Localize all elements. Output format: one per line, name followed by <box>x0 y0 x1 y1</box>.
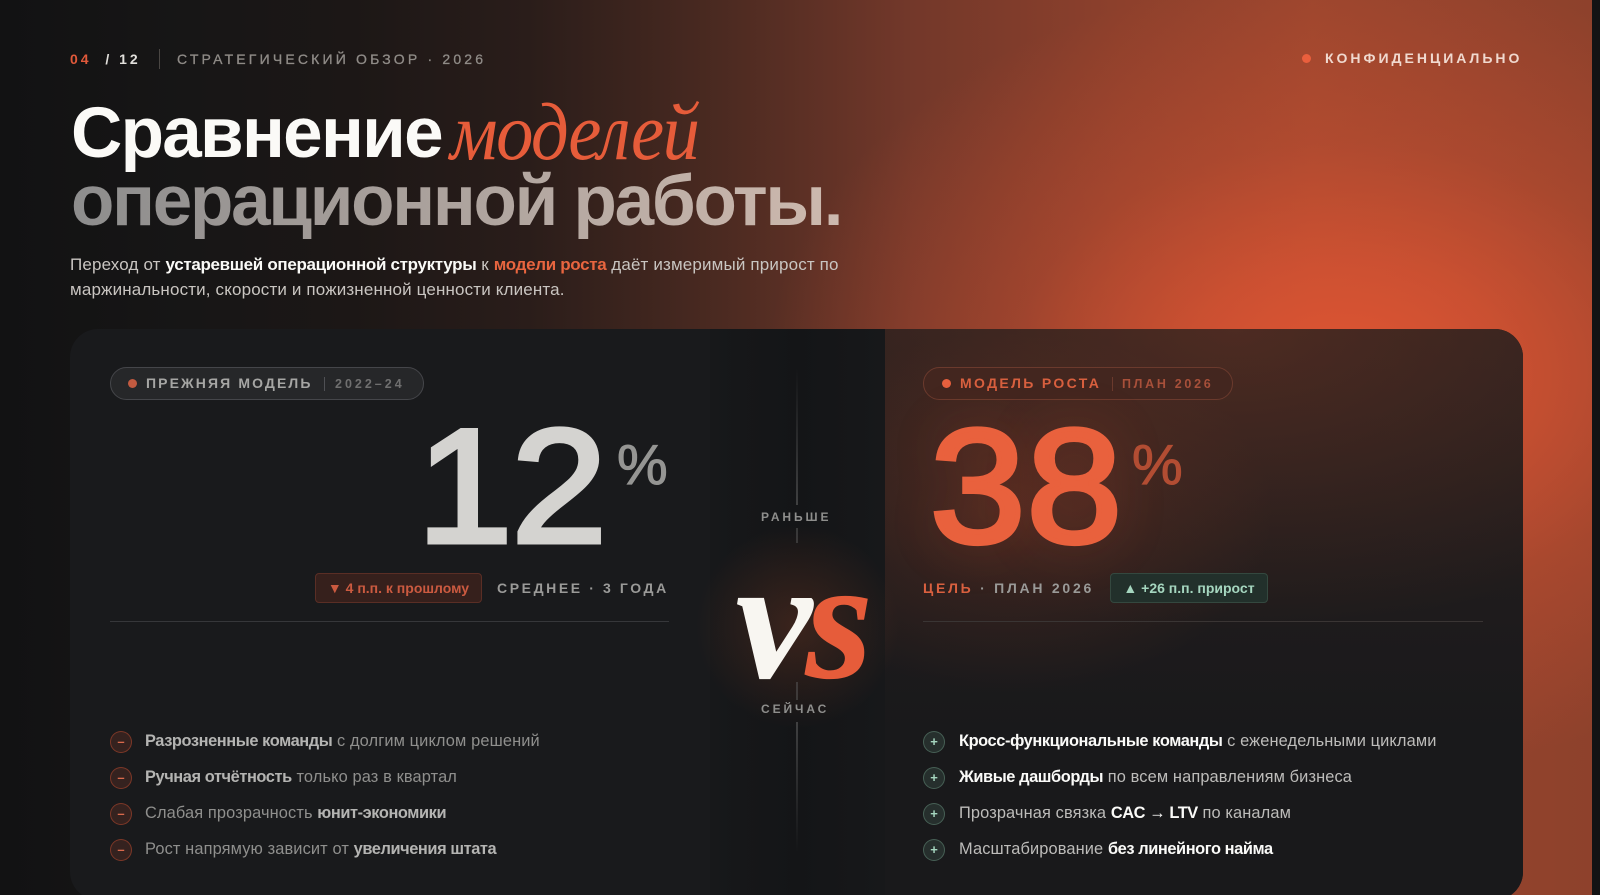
item 4: Рост напрямую зависит от увеличения штата <box>145 840 496 858</box>
item 2: Живые дашборды по всем направлениям бизнеса <box>959 768 1352 786</box>
item 4: Масштабирование без линейного найма <box>959 840 1273 858</box>
item 3: Прозрачная связка CAC → LTV по каналам <box>959 804 1291 822</box>
item 2: + <box>930 770 938 785</box>
panel: right background <box>885 329 1523 895</box>
confidentiality tag <box>1302 50 1522 66</box>
title word: Сравнение: Сравнение <box>71 94 442 173</box>
item 3: – <box>117 806 125 821</box>
badge: down <box>315 573 482 603</box>
item 1: – <box>117 734 125 749</box>
subtitle <box>70 255 839 299</box>
glow behind VS <box>695 524 900 729</box>
pill: old model <box>110 367 424 400</box>
panel: center column <box>710 329 885 895</box>
item 2: Ручная отчётность только раз в квартал <box>145 768 457 786</box>
pill plan: ПЛАН 2026 <box>1122 377 1213 391</box>
item 4: – <box>117 842 125 857</box>
center label: раньше: РАНЬШЕ <box>761 510 831 524</box>
divider <box>110 621 669 622</box>
item 1: + <box>930 734 938 749</box>
icon: status dot <box>1302 54 1311 63</box>
right column <box>923 367 1483 622</box>
caption: ЦЕЛЬ · ПЛАН 2026 <box>923 580 1094 596</box>
VS mark: vs <box>736 525 866 714</box>
center label: сейчас: СЕЙЧАС <box>761 702 829 716</box>
badge: down: ▼ 4 п.п. к прошлому <box>328 580 469 596</box>
item 1: Кросс-функциональные команды с еженедельными циклами <box>959 732 1436 750</box>
subtitle: маржинальности, скорости и пожизненной ценности клиента. <box>70 280 565 299</box>
center: vertical lines <box>796 381 798 840</box>
title line 2: операционной работы. <box>71 162 841 241</box>
item 1: Разрозненные команды с долгим циклом решений <box>145 732 540 750</box>
metric unit: % <box>617 433 668 497</box>
pill years: 2022–24 <box>335 377 405 391</box>
caption: СРЕДНЕЕ · 3 ГОДА <box>497 580 669 596</box>
metric unit: % <box>1132 433 1183 497</box>
item 3: + <box>930 806 938 821</box>
item 3: Слабая прозрачность юнит-экономики <box>145 804 446 822</box>
header: section label: СТРАТЕГИЧЕСКИЙ ОБЗОР · 2026 <box>177 51 486 67</box>
confidentiality label: КОНФИДЕНЦИАЛЬНО <box>1325 50 1522 66</box>
pill sep <box>324 377 325 391</box>
metric: 12: 12 <box>417 396 606 577</box>
title word: моделей: моделей <box>450 86 699 177</box>
header: page counter: 04 / 12 <box>70 51 141 67</box>
panel: comparison <box>70 329 1523 895</box>
subtitle: Переход от устаревшей операционной структуры к модели роста даёт измеримый прирост по <box>70 255 839 274</box>
icon: pill dot <box>128 379 137 388</box>
icon: pill dot <box>942 379 951 388</box>
metric: 38: 38 <box>930 396 1123 577</box>
item 4: + <box>930 842 938 857</box>
pill label: МОДЕЛЬ РОСТА <box>960 375 1101 391</box>
pill sep <box>1112 377 1113 391</box>
right edge strip <box>1592 0 1600 895</box>
left list <box>110 731 540 861</box>
pill label: ПРЕЖНЯЯ МОДЕЛЬ <box>146 375 312 391</box>
header divider <box>159 49 160 69</box>
pill: growth model <box>923 367 1233 400</box>
item 2: – <box>117 770 125 785</box>
badge: up <box>1110 573 1268 603</box>
right list <box>923 731 1436 861</box>
divider <box>923 621 1483 622</box>
badge: up: ▲ +26 п.п. прирост <box>1123 580 1255 596</box>
left column <box>110 367 669 622</box>
title <box>71 86 841 241</box>
